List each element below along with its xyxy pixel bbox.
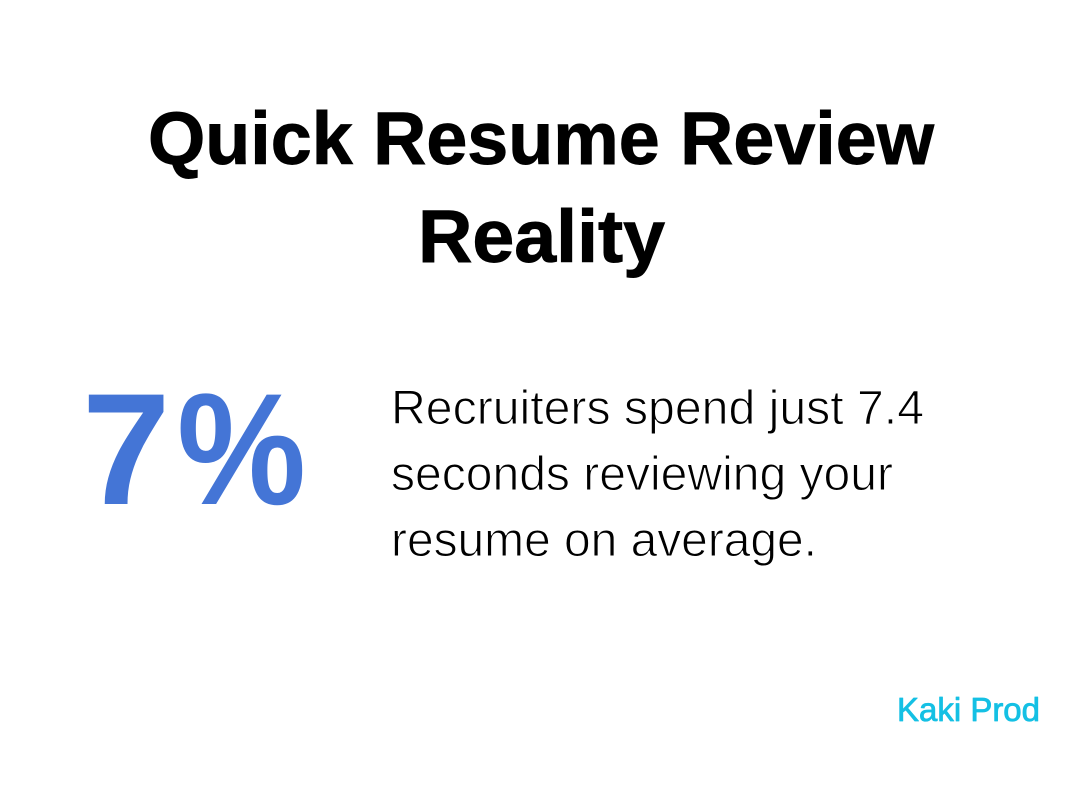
title <box>148 97 934 278</box>
big statistic: 7% <box>82 360 306 538</box>
big statistic: 7%: 7 <box>82 360 170 538</box>
title: Quick Resume Review <box>148 97 934 180</box>
logo: Kaki Prod: Kaki Prod <box>897 691 1040 728</box>
title: Reality <box>418 195 665 278</box>
description text: Recruiters spend just 7.4 <box>391 382 924 435</box>
big statistic: 7%: % <box>177 360 306 538</box>
description text: seconds reviewing your <box>391 448 893 501</box>
description text: resume on average. <box>391 514 817 567</box>
description text <box>391 382 924 567</box>
